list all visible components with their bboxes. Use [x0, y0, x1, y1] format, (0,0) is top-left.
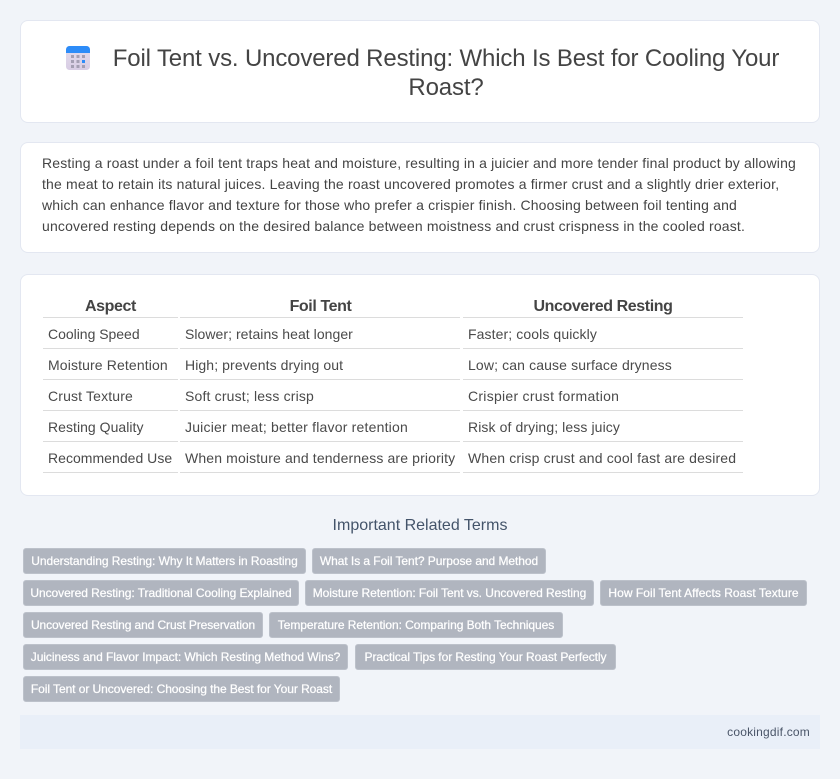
comparison table: Moisture Retention — [48, 357, 168, 373]
comparison table: Crispier crust formation — [468, 388, 619, 404]
intro paragraph: which can enhance flavor and texture for those who prefer a crispier finish. Choosing between foil tenting and — [42, 197, 737, 213]
comparison table: Resting Quality — [48, 419, 144, 435]
panel: intro text — [20, 142, 820, 253]
related term tags: Foil Tent or Uncovered: Choosing the Best for Your Roast — [31, 682, 332, 696]
comparison table: Soft crust; less crisp — [185, 388, 314, 404]
related term tags: Temperature Retention: Comparing Both Techniques — [278, 618, 554, 632]
comparison table: Crust Texture — [48, 388, 133, 404]
comparison table: Cooling Speed — [48, 326, 140, 342]
intro paragraph — [42, 155, 796, 234]
comparison table: Slower; retains heat longer — [185, 326, 353, 342]
related term tags — [23, 548, 807, 702]
footer source: cookingdif.com — [727, 725, 810, 739]
comparison table: Uncovered Resting — [533, 298, 672, 315]
related term tags: Understanding Resting: Why It Matters in Roasting — [31, 554, 298, 568]
title: Roast? — [408, 74, 484, 101]
panel: comparison table — [20, 274, 820, 496]
intro paragraph: uncovered resting depends on the desired balance between moistness and crust crispness in the cooled roast. — [42, 218, 745, 234]
related term tags: Juiciness and Flavor Impact: Which Resting Method Wins? — [31, 650, 340, 664]
related term tags: What Is a Foil Tent? Purpose and Method — [320, 554, 538, 568]
comparison table: Aspect — [85, 298, 136, 315]
related term tags: Practical Tips for Resting Your Roast Perfectly — [365, 650, 606, 664]
comparison table: Risk of drying; less juicy — [468, 419, 620, 435]
comparison table: Faster; cools quickly — [468, 326, 597, 342]
comparison table: Foil Tent — [290, 298, 351, 315]
title — [113, 45, 779, 101]
related term tags: How Foil Tent Affects Roast Texture — [608, 586, 799, 600]
panel: header — [20, 20, 820, 123]
footer bar — [20, 715, 820, 749]
comparison table: Juicier meat; better flavor retention — [185, 419, 408, 435]
title: Foil Tent vs. Uncovered Resting: Which Is Best for Cooling Your — [113, 45, 779, 72]
comparison table: Low; can cause surface dryness — [468, 357, 672, 373]
comparison table: When crisp crust and cool fast are desired — [468, 450, 736, 466]
comparison table: High; prevents drying out — [185, 357, 343, 373]
related term tags: Uncovered Resting: Traditional Cooling Explained — [30, 586, 292, 600]
icon: calendar — [66, 46, 90, 70]
related terms heading: Important Related Terms — [333, 517, 507, 534]
comparison table: Recommended Use — [48, 450, 172, 466]
intro paragraph: the meat to retain its natural juices. Leaving the roast uncovered promotes a firmer crust and a slightly drier exterior, — [42, 176, 779, 192]
comparison table — [43, 298, 743, 473]
related term tags: Uncovered Resting and Crust Preservation — [31, 618, 255, 632]
related term tags: Moisture Retention: Foil Tent vs. Uncovered Resting — [313, 586, 586, 600]
intro paragraph: Resting a roast under a foil tent traps heat and moisture, resulting in a juicier and more tender final product by allowing — [42, 155, 796, 171]
comparison table: When moisture and tenderness are priority — [185, 450, 455, 466]
